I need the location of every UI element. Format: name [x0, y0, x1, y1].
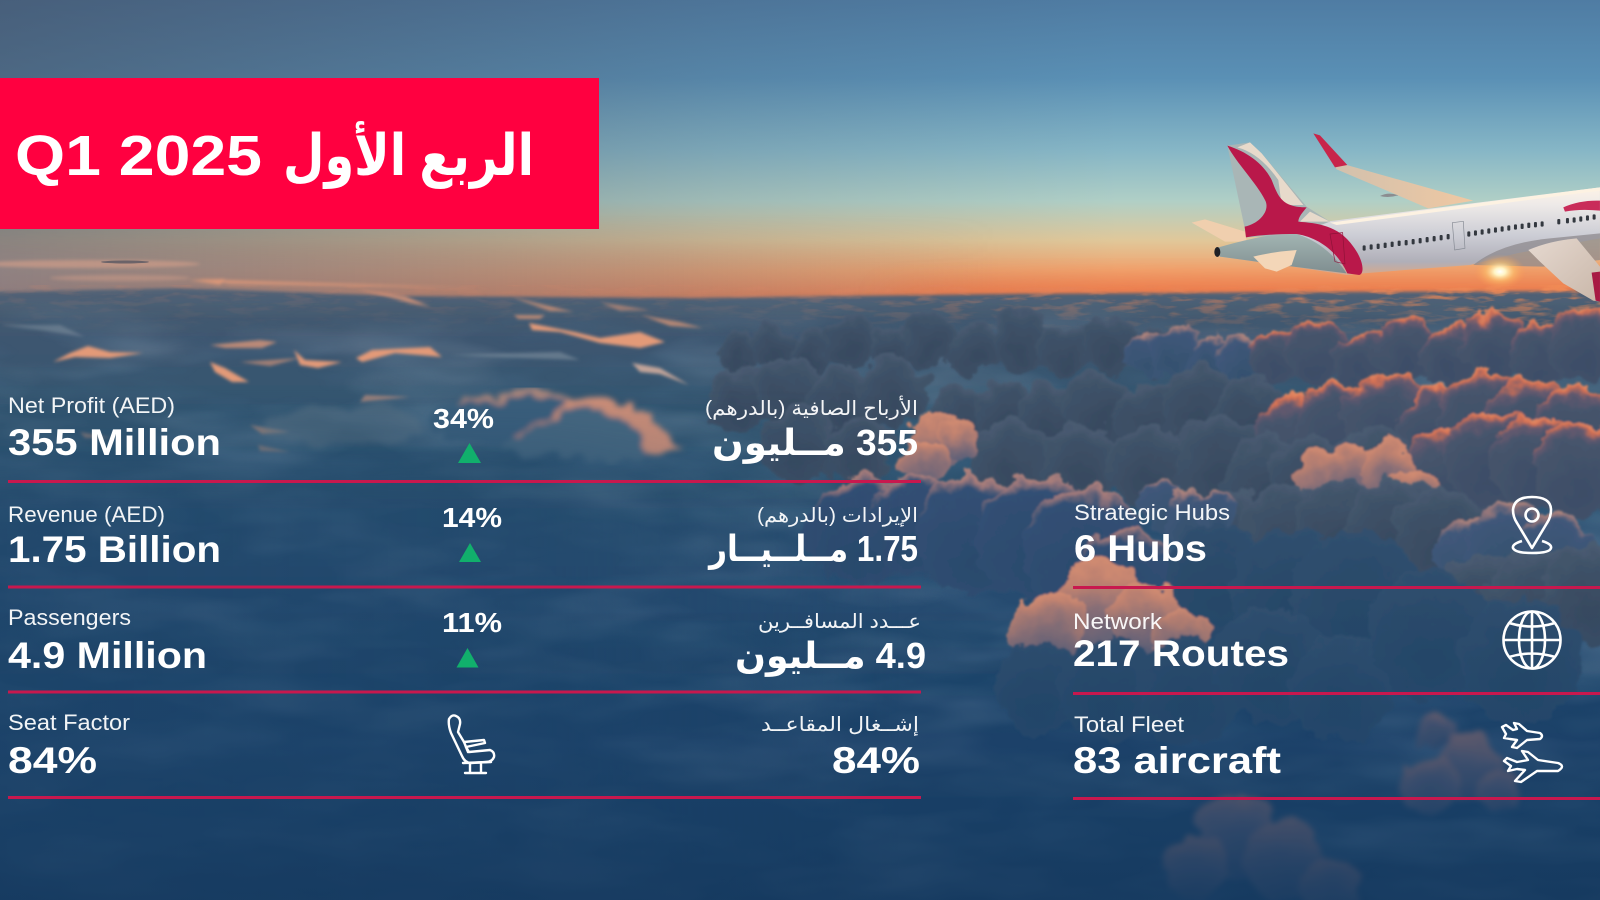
near billows	[805, 475, 1600, 744]
left large cloud	[260, 394, 682, 459]
row: seat factor: 84%	[8, 740, 97, 781]
row: revenue: الإيرادات (بالدرهم)	[757, 505, 918, 527]
title arabic: الربع الأول	[283, 121, 534, 189]
row: total fleet: 83 aircraft	[1073, 740, 1281, 781]
row: strategic hubs	[1074, 497, 1551, 569]
panel: network stats	[1073, 497, 1600, 798]
row: passengers: 4.9 Million	[8, 635, 207, 676]
row: total fleet: Total Fleet	[1074, 712, 1184, 737]
title banner	[0, 78, 599, 229]
background: sunset sky	[0, 0, 1600, 316]
mid billows	[706, 357, 1600, 528]
tail logo	[1227, 146, 1363, 275]
near winglet	[1592, 272, 1600, 302]
fuselage	[1217, 187, 1600, 275]
row: network: 217 Routes	[1073, 633, 1289, 674]
winglet	[1313, 133, 1347, 167]
row: passengers	[8, 605, 926, 677]
windows	[1363, 214, 1596, 251]
row: revenue: 14%	[442, 502, 502, 533]
row: passengers: 11%	[442, 607, 502, 638]
row: seat factor	[8, 710, 920, 781]
far billows	[720, 307, 1600, 390]
background: cloud layer	[0, 279, 1600, 900]
lower clouds	[1163, 712, 1522, 900]
icon: globe	[1504, 612, 1560, 668]
row: net profit: 34%	[433, 403, 494, 434]
row: total fleet	[1073, 712, 1562, 782]
row: passengers: عـــدد المسافــرين	[758, 611, 921, 633]
near stabilizer	[1253, 250, 1297, 272]
panel: financial and operations rows	[8, 393, 926, 798]
row: strategic hubs: Strategic Hubs	[1074, 500, 1230, 525]
tail fin	[1227, 142, 1330, 237]
row: seat factor: 84%	[832, 740, 920, 781]
row: revenue: 1.75 مــلــيــار	[707, 528, 918, 570]
row: net profit: 355 Million	[8, 422, 221, 463]
row: strategic hubs: 6 Hubs	[1074, 528, 1207, 569]
row: revenue: 1.75 Billion	[8, 529, 221, 570]
tail cone	[1218, 234, 1347, 273]
near wing	[1528, 238, 1600, 302]
row: revenue: Revenue (AED)	[8, 502, 165, 527]
row: net profit: الأرباح الصافية (بالدرهم)	[705, 396, 918, 420]
row: passengers: 4.9 مــليون	[735, 635, 926, 677]
divider lines	[1073, 588, 1600, 798]
row: net profit: 355 مــليون	[712, 422, 918, 464]
row: seat factor: Seat Factor	[8, 710, 130, 735]
icon: location pin	[1513, 497, 1551, 553]
icon: seat	[449, 715, 494, 773]
row: network: Network	[1073, 609, 1163, 634]
row: passengers: Passengers	[8, 605, 131, 630]
title latin: Q1 2025	[15, 124, 262, 188]
row: net profit: Net Profit (AED)	[8, 393, 175, 418]
icon: aircraft	[1502, 723, 1562, 782]
row: net profit	[8, 393, 918, 464]
horizontal stabilizer	[1192, 219, 1247, 242]
far wing	[1323, 148, 1473, 208]
airplane	[1192, 133, 1600, 302]
row: revenue	[8, 502, 918, 570]
row: seat factor: إشــغال المقاعــد	[761, 714, 919, 737]
row divider lines	[8, 482, 921, 798]
wing root shadow	[1473, 233, 1600, 267]
door	[1452, 221, 1465, 250]
left stratus highlights	[0, 279, 703, 452]
row: network	[1073, 609, 1560, 674]
